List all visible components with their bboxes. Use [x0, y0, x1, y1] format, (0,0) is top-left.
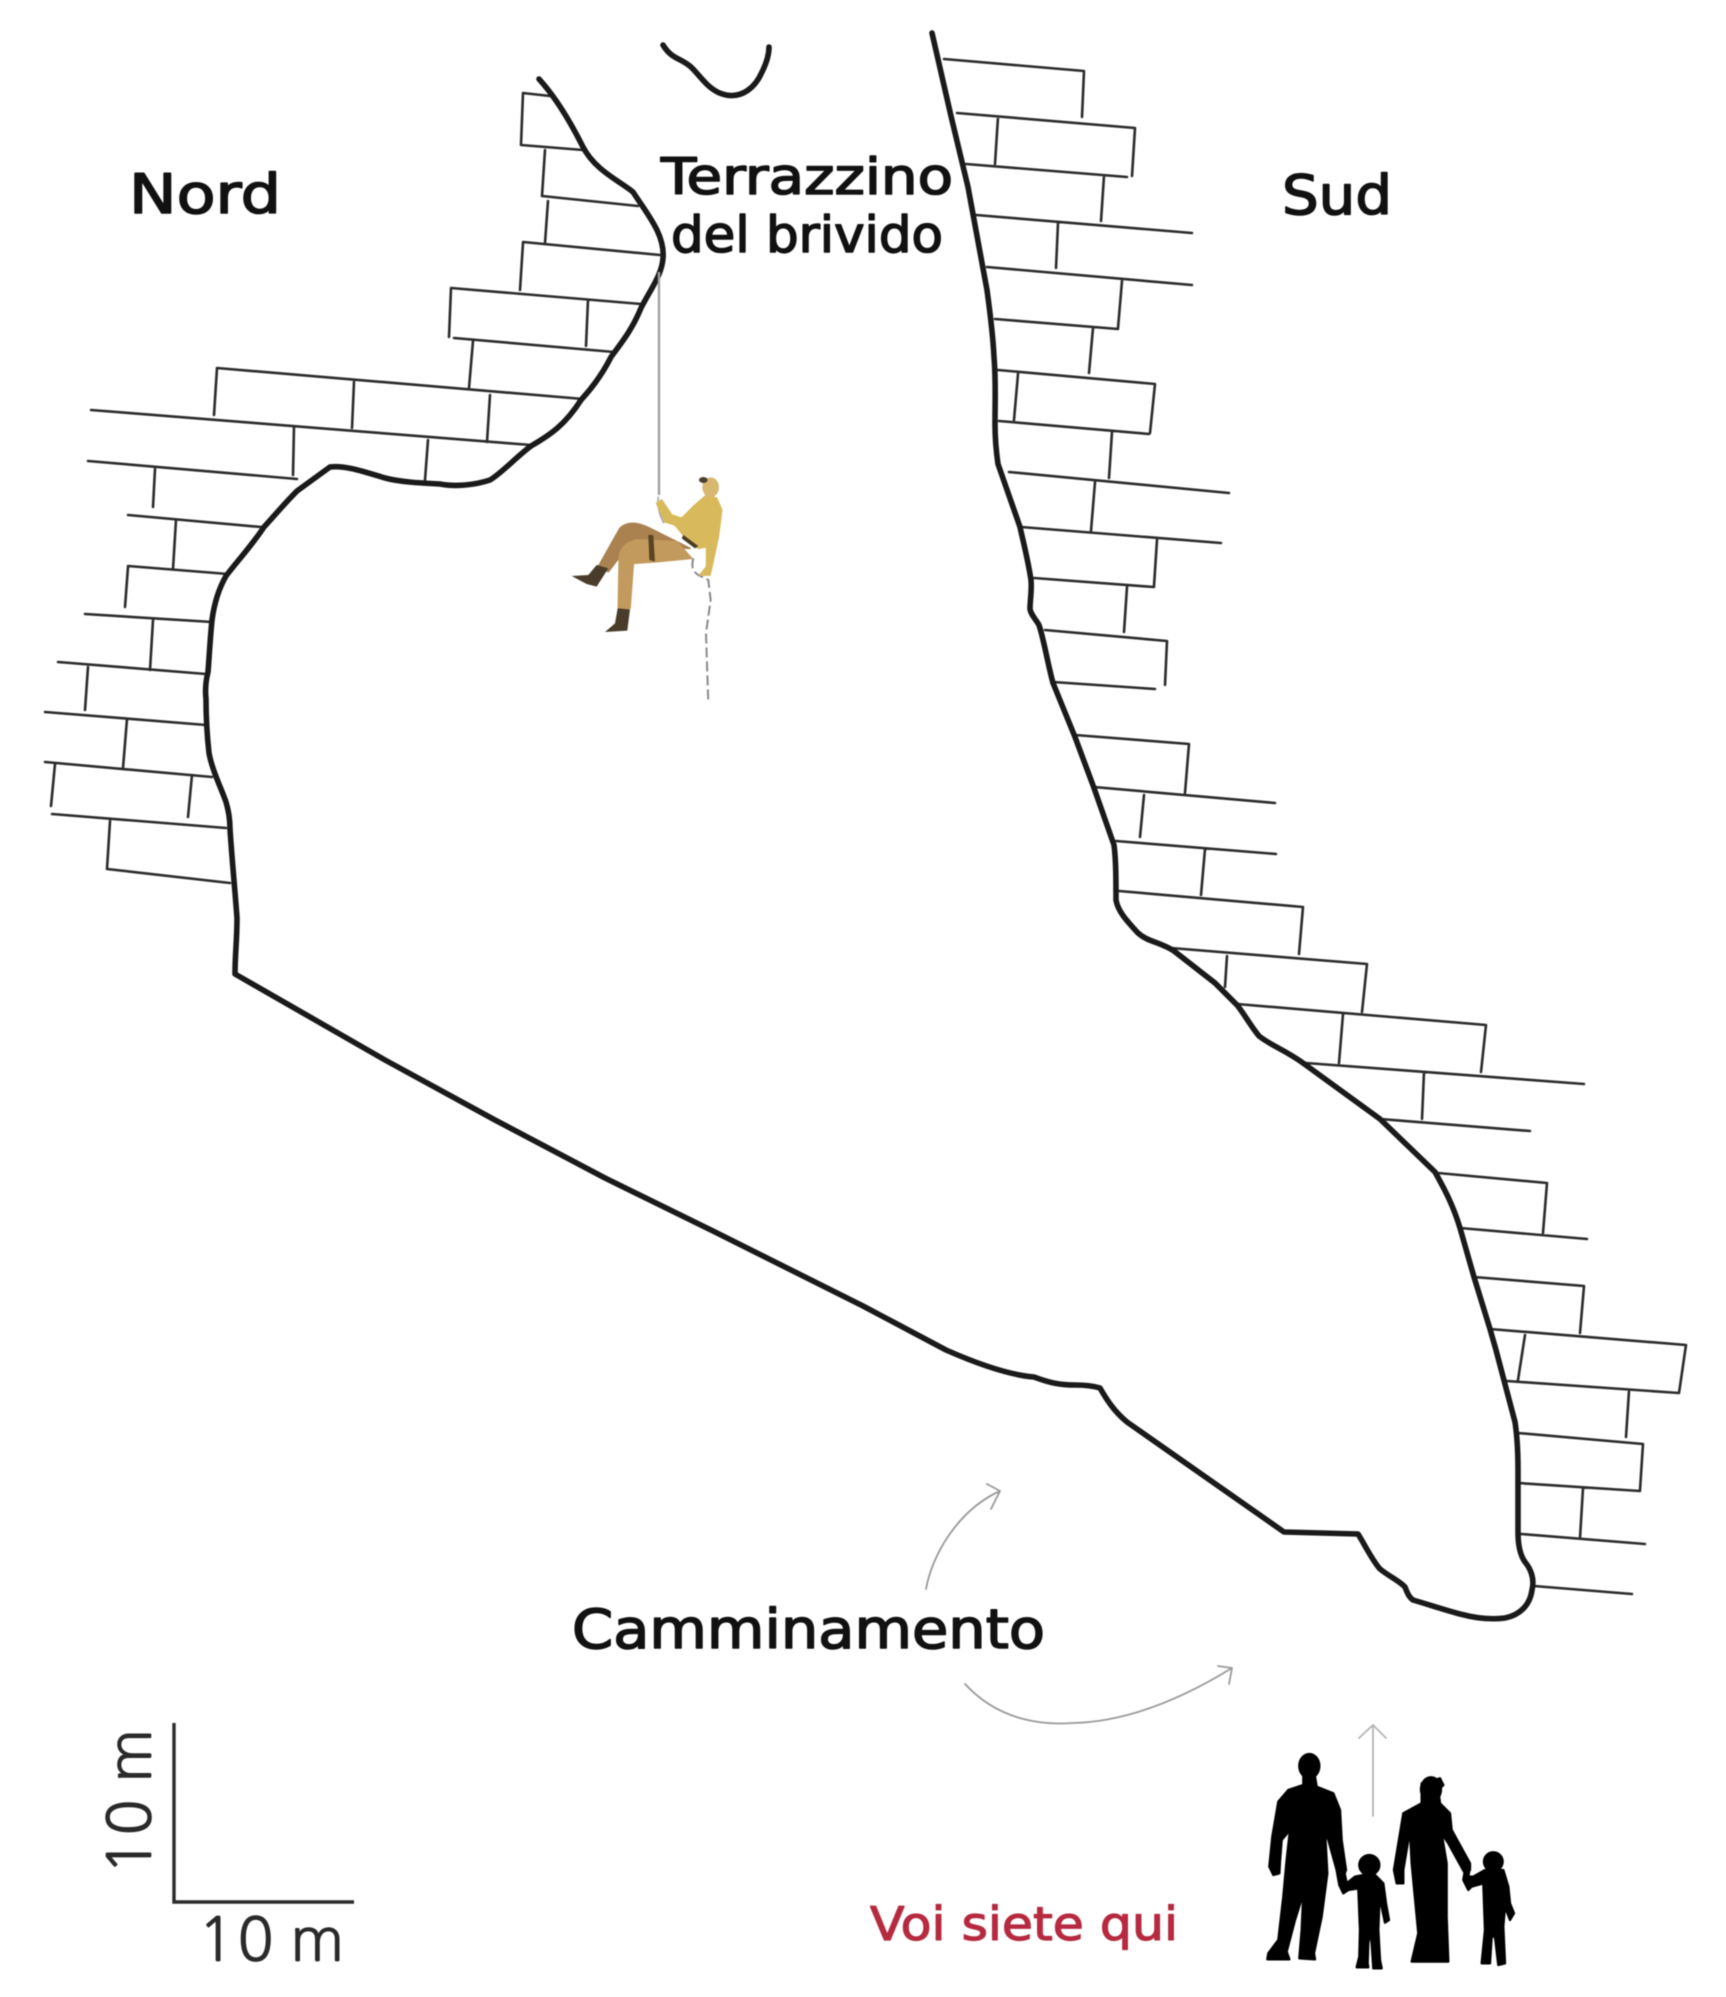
label: Camminamento: Camminamento [572, 1598, 1045, 1661]
label: Terrazzino del brivido: del brivido [671, 206, 943, 264]
woman [1394, 1777, 1470, 1962]
brick wall: south side [944, 59, 1686, 1594]
heading: Sud: Sud [1282, 164, 1392, 227]
cave outline [206, 33, 1533, 1619]
label: Voi siete qui: Voi siete qui [870, 1897, 1178, 1951]
top opening squiggle [663, 45, 769, 96]
icon: climber abseiling [572, 477, 722, 703]
label: Terrazzino del brivido: Terrazzino [660, 148, 953, 206]
arrow: walkway curving right [965, 1666, 1232, 1723]
scale bar: 10 [100, 1796, 160, 1875]
icon: family silhouette [1267, 1754, 1514, 1968]
arrow: walkway curving up [926, 1484, 1000, 1589]
arrow: upward from family [1359, 1725, 1386, 1816]
man [1267, 1754, 1346, 1959]
scale bar: m [100, 1729, 160, 1783]
scale bar: m [290, 1910, 344, 1970]
scale bar: 10 [198, 1910, 277, 1970]
girl [1463, 1852, 1514, 1965]
scale bar [100, 1723, 354, 1970]
heading: Nord: Nord [129, 163, 281, 226]
rope from terrace [658, 272, 660, 495]
brick wall: north side [45, 93, 660, 883]
boy [1337, 1855, 1389, 1968]
label: Terrazzino del brivido [660, 148, 953, 264]
